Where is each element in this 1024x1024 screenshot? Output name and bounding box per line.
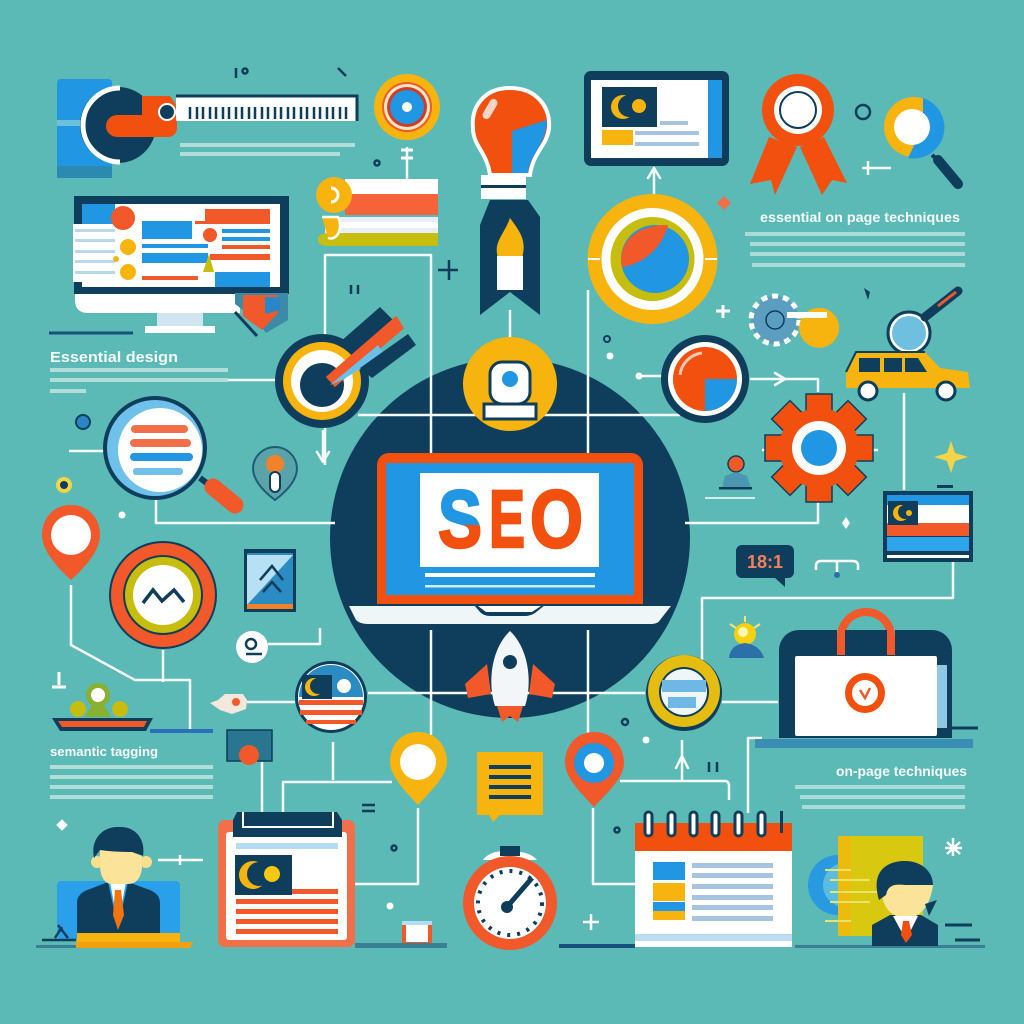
- small marks: [236, 68, 717, 850]
- icon: flag card right: [883, 485, 973, 562]
- icon: ribbon award: [750, 74, 847, 195]
- text block: lower right: [795, 764, 967, 809]
- heading: left block: Essential design: [50, 349, 178, 366]
- icon: light bulb and rocket: [473, 88, 549, 315]
- text block: lower left: [50, 744, 213, 799]
- icon: small pin badge: [253, 447, 297, 500]
- small left marks: [58, 821, 203, 865]
- icon: flag document: [218, 812, 355, 947]
- small diamond: [842, 517, 850, 529]
- icon: briefcase laptop: [755, 612, 978, 748]
- icon: small lightbulb person: [729, 616, 764, 658]
- icon: tray with coins: [52, 683, 213, 733]
- icon: small tag: [210, 694, 247, 714]
- icon: yellow pin: [390, 732, 447, 805]
- icon: left person at desk: [36, 827, 193, 948]
- heading: top right: [745, 209, 965, 267]
- icon: pie circle: [661, 335, 749, 423]
- icon: orange star and small marks top right: [604, 196, 731, 380]
- icon: gears and magnifier: [751, 288, 958, 354]
- icon: small dots: [52, 415, 126, 687]
- icon: orange gear: [765, 394, 873, 502]
- icon: left magnifier: [103, 396, 235, 505]
- icon: small bracket mark: [816, 561, 858, 578]
- icon: note: [477, 752, 543, 822]
- SEO title: [438, 474, 583, 565]
- panel: central circle: [330, 358, 690, 718]
- icon: flag circle: [295, 661, 367, 733]
- icon: small box: [355, 921, 447, 948]
- icon: small folder: [227, 730, 272, 765]
- icon: magnifier chart: [856, 97, 958, 184]
- heading: left block: [49, 333, 228, 393]
- text block: lower left: semantic tagging: [50, 744, 158, 759]
- icon: yellow car: [846, 352, 970, 400]
- small dots: [386, 736, 650, 910]
- icon: blue pin: [565, 732, 624, 807]
- icon: target with pencils: [275, 307, 416, 428]
- icon: right person with document: [795, 836, 985, 948]
- icon: small pin person: [705, 456, 755, 499]
- icon: target glass: [646, 655, 722, 731]
- heading: top right: essential on page techniques: [760, 209, 960, 225]
- connector lines: [69, 147, 953, 884]
- icon: stopwatch: [463, 846, 557, 950]
- icon: shield: [235, 293, 288, 336]
- callout: number badge: [736, 545, 794, 587]
- icon: desktop monitor: [73, 196, 289, 333]
- SEO title: O: [530, 474, 583, 565]
- icon: framed arrow card: [244, 549, 296, 612]
- text block: top-left lines: [180, 143, 355, 156]
- icon: globe ring: [588, 194, 718, 324]
- callout: number badge: 18:1: [747, 552, 783, 572]
- SEO title: E: [489, 474, 525, 565]
- icon: top yellow badge: [463, 337, 557, 431]
- icon: sparkle: [934, 441, 968, 473]
- text block: lower right: on-page techniques: [836, 764, 967, 779]
- icon: rocket: [465, 631, 555, 722]
- decorative sparkles: [583, 838, 962, 930]
- icon: top-left blue device and orange tool: [57, 79, 357, 178]
- icon: top-center flag card: [584, 71, 729, 166]
- icon: wave dial: [109, 541, 217, 649]
- icon: left map pin: [42, 505, 100, 580]
- icon: top ring target: [374, 74, 440, 158]
- laptop with SEO: [349, 453, 671, 624]
- icon: stacked book: [316, 177, 438, 246]
- icon: calendar: [559, 811, 792, 948]
- icon: small search bubble: [236, 631, 268, 663]
- SEO title: S: [438, 474, 482, 565]
